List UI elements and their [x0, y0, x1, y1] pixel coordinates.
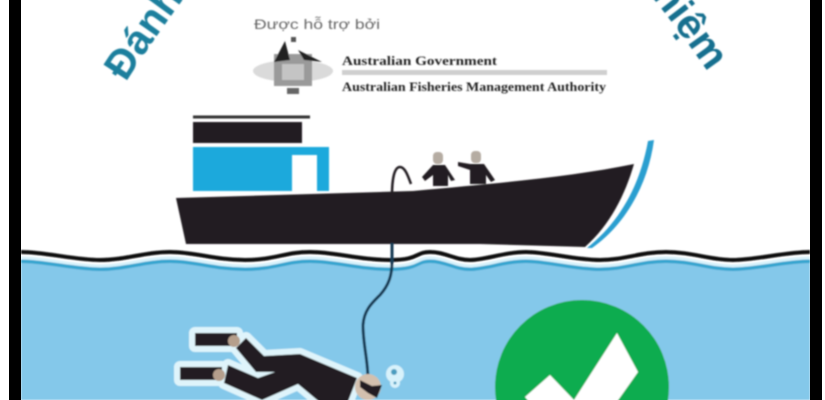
- government name: Australian Government: [342, 54, 498, 68]
- water: [21, 262, 810, 400]
- sea surface waves: [21, 252, 810, 269]
- supporter label: Được hỗ trợ bởi: [254, 16, 380, 32]
- right border: [810, 0, 822, 400]
- ankles: [228, 335, 240, 347]
- mask and rope hold: [360, 380, 382, 398]
- boat: [176, 116, 654, 248]
- head: [355, 374, 381, 400]
- check badge: [495, 300, 669, 400]
- check mark: [525, 333, 638, 400]
- diver body: [224, 338, 357, 400]
- bow stripe: [587, 140, 654, 248]
- crew member 2: [458, 151, 495, 184]
- cabin blue: [193, 147, 329, 191]
- crew member 1: [422, 152, 455, 186]
- diver white outline: [180, 333, 357, 400]
- crest: [253, 37, 333, 94]
- upper fin: [195, 333, 237, 346]
- logo: Australian Government: [253, 37, 607, 94]
- hook: [392, 167, 411, 196]
- roof line: [193, 116, 310, 118]
- lower fin: [180, 367, 222, 380]
- cabin top: [193, 122, 302, 143]
- bubbles: [386, 365, 404, 388]
- hull: [176, 164, 634, 247]
- rope: [363, 243, 392, 380]
- left border: [9, 0, 21, 400]
- diver: [180, 333, 404, 400]
- agency name: Australian Fisheries Management Authority: [342, 80, 607, 94]
